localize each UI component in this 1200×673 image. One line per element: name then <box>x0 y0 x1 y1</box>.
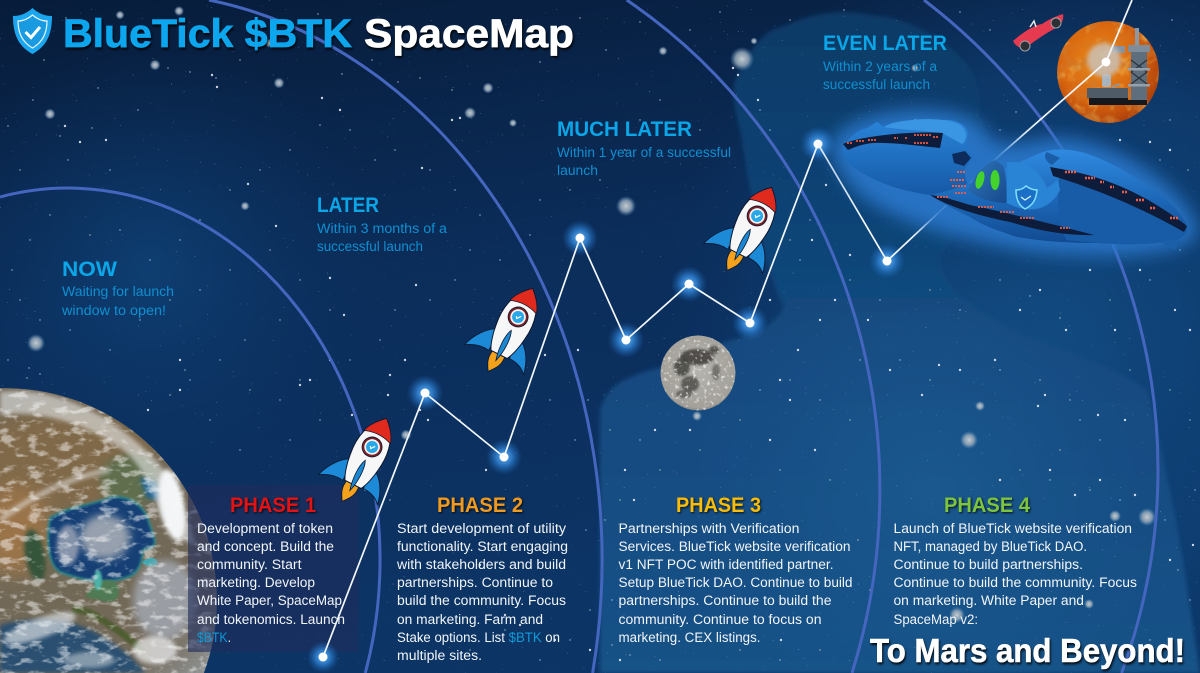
right hull window strip <box>1050 167 1187 232</box>
timeline label: MUCH LATER: MUCH LATER <box>557 118 692 141</box>
phase 4 text: SpaceMap v2: <box>894 612 978 627</box>
phase 2 text: PHASE 2 <box>437 494 523 517</box>
Yucatan and Caribbean <box>85 580 119 602</box>
Phase 1 panel background <box>188 485 358 652</box>
phase 1 text: marketing. Develop <box>197 575 315 590</box>
Title <box>63 12 574 56</box>
phase 1 text: PHASE 1 <box>230 494 316 517</box>
phase 3 text: Partnerships with Verification <box>618 521 800 536</box>
tagline: To Mars and Beyond! <box>870 632 1185 669</box>
timeline label: EVEN LATER: EVEN LATER <box>823 32 947 55</box>
phase 3 text: v1 NFT POC with identified partner. <box>618 557 834 572</box>
timeline label: MUCH LATER: launch <box>557 163 598 178</box>
timeline label: MUCH LATER: Within 1 year of a successful <box>557 145 731 160</box>
central dome <box>1007 162 1060 209</box>
timeline label: NOW: Waiting for launch <box>62 284 174 299</box>
phase 4 text <box>894 494 1137 627</box>
lower window strip <box>930 195 1094 235</box>
phase 2 text: multiple sites. <box>397 648 482 663</box>
phase 2 text: Start development of utility <box>397 521 566 536</box>
timeline label: EVEN LATER: successful launch <box>823 77 930 92</box>
phase 3 text: Services. BlueTick website verification <box>618 539 850 554</box>
launch tower on Mars <box>1087 28 1150 105</box>
cloud bands <box>0 391 195 545</box>
icon: shield logo <box>13 8 52 54</box>
timeline label: LATER: Within 3 months of a <box>317 221 448 236</box>
lower disc <box>930 149 1187 244</box>
phase 1 text: community. Start <box>197 557 302 572</box>
timeline label: LATER <box>317 194 448 254</box>
spaceship <box>831 109 1198 255</box>
timeline label: EVEN LATER: Within 2 years of a <box>823 59 938 74</box>
phase 1 text: Development of token <box>197 521 333 536</box>
phase 1 text: and tokenomics. Launch <box>197 612 345 627</box>
rocket 2 <box>459 273 560 386</box>
phase 4 text: on marketing. White Paper and <box>894 593 1084 608</box>
Tesla roadster <box>1013 14 1063 51</box>
phase 3 text: PHASE 3 <box>676 494 761 517</box>
tail fin <box>1045 152 1181 250</box>
phase 2 text: build the community. Focus <box>397 593 566 608</box>
ship glow <box>831 109 1198 255</box>
timeline label: NOW: window to open! <box>61 303 166 318</box>
timeline label: MUCH LATER <box>557 118 731 178</box>
phase 3 text: community. Continue to focus on <box>618 612 822 627</box>
phase 4 text: PHASE 4 <box>944 494 1030 517</box>
phase 4 text: Continue to build the community. Focus <box>894 575 1137 590</box>
timeline label: LATER: successful launch <box>317 239 423 254</box>
moon <box>660 335 736 411</box>
shield emblem <box>1016 186 1037 209</box>
phase 2 text: functionality. Start engaging <box>397 539 568 554</box>
left hull window strip <box>843 133 943 150</box>
silhouette figure behind the map <box>600 12 1200 673</box>
rocket 1 <box>313 403 414 516</box>
nose with green eyes <box>968 160 1006 203</box>
Earth <box>0 385 225 673</box>
timeline label: LATER: LATER <box>317 194 379 217</box>
phase 2 text <box>396 494 568 663</box>
Title: BlueTick $BTK <box>63 12 352 56</box>
rocket 3 <box>698 172 799 285</box>
phase 2 text: Stake options. List $BTK on <box>397 630 560 645</box>
phase 4 text: Continue to build partnerships. <box>894 557 1083 572</box>
phase 2 text: on marketing. Farm and <box>397 612 543 627</box>
phase 3 text: marketing. CEX listings. <box>618 630 760 645</box>
left hull <box>843 120 973 197</box>
timeline label: EVEN LATER <box>823 32 947 92</box>
phase 1 text <box>197 494 345 645</box>
phase 1 text: White Paper, SpaceMap <box>197 593 342 608</box>
timeline label: NOW: NOW <box>62 258 117 281</box>
Gulf of Mexico <box>48 497 155 581</box>
Mars <box>1057 21 1159 123</box>
timeline label: NOW <box>61 258 174 318</box>
phase 4 text: NFT, managed by BlueTick DAO. <box>894 539 1087 554</box>
phase 4 text: Launch of BlueTick website verification <box>894 521 1132 536</box>
Title: SpaceMap <box>364 12 574 56</box>
phase 3 text: Setup BlueTick DAO. Continue to build <box>618 575 852 590</box>
roadmap path line with nodes <box>307 0 1132 673</box>
phase 1 text: $BTK. <box>197 630 231 645</box>
phase 2 text: partnerships. Continue to <box>397 575 553 590</box>
phase 1 text: and concept. Build the <box>197 539 334 554</box>
phase 3 text: partnerships. Continue to build the <box>618 593 832 608</box>
phase 3 text <box>618 494 852 645</box>
phase 2 text: with stakeholders and build <box>396 557 566 572</box>
